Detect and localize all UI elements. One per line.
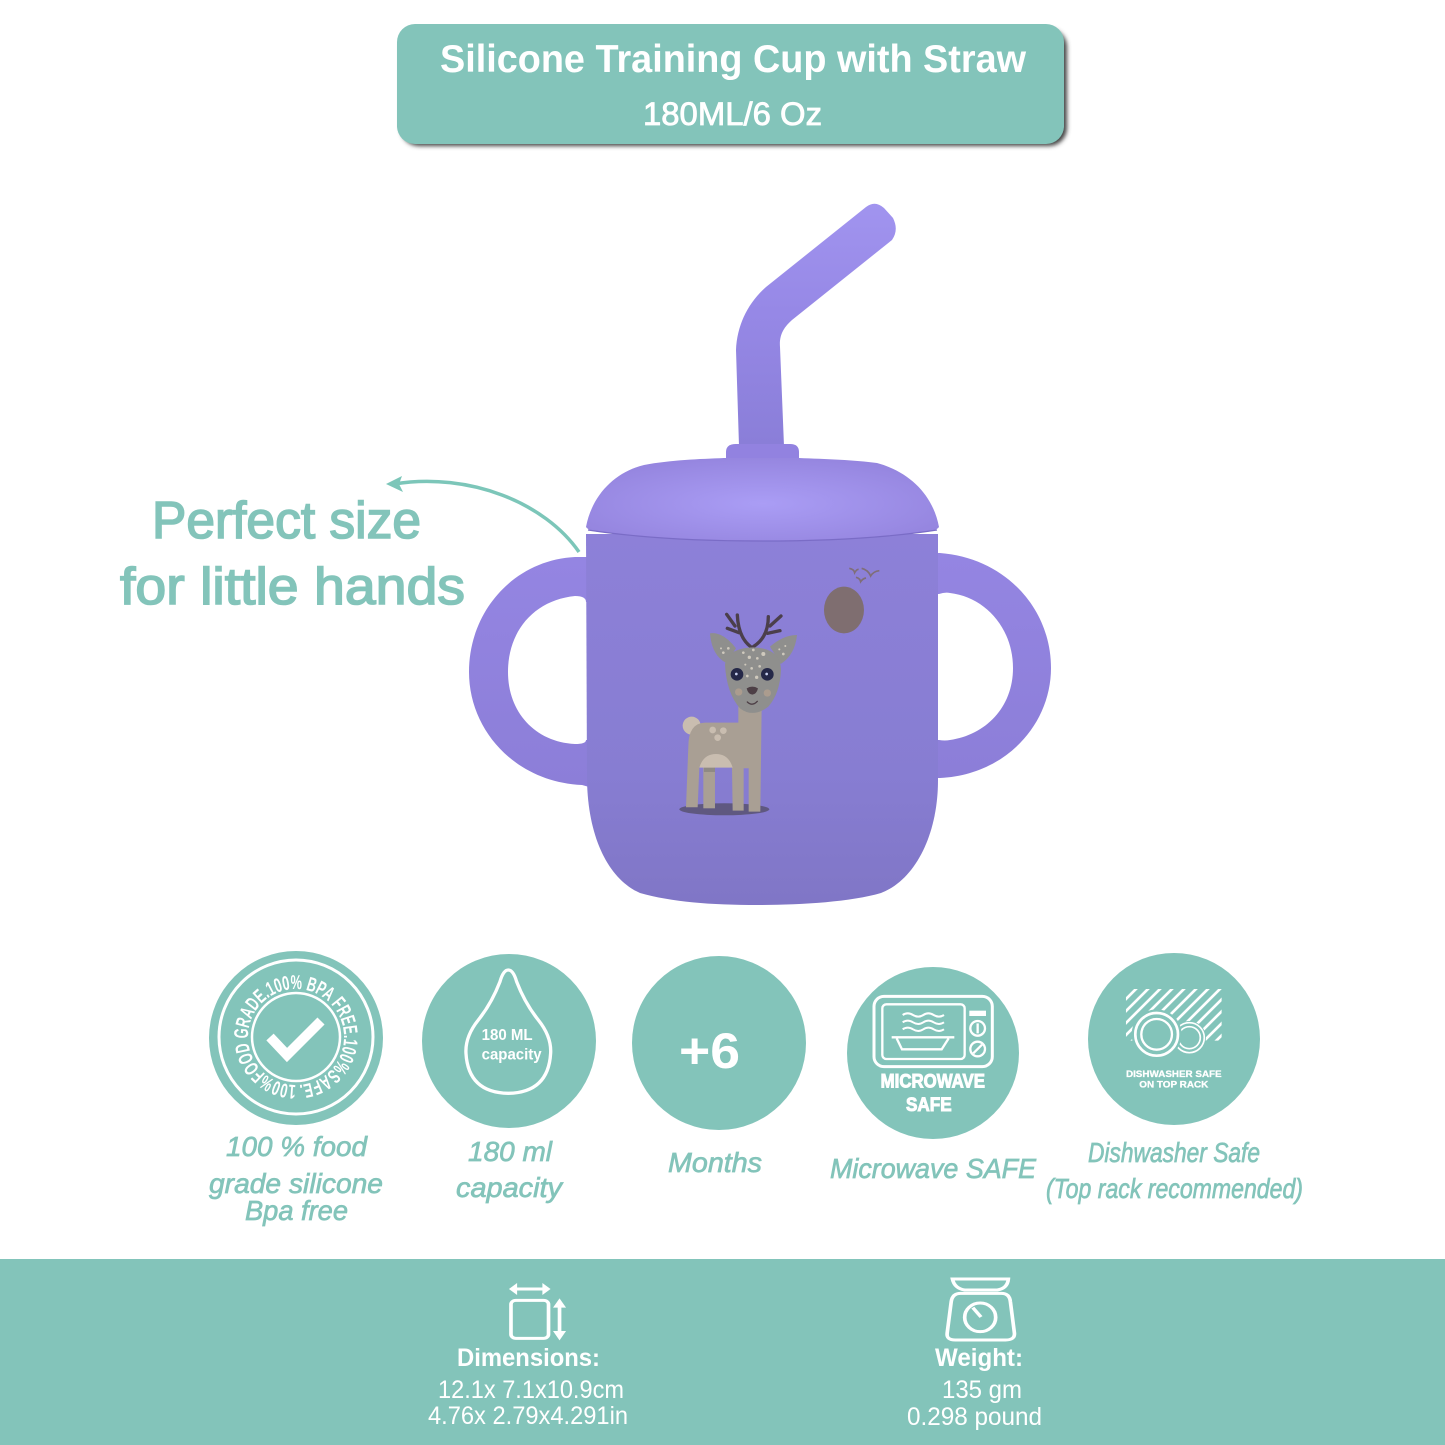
caption: dishwasher: (Top rack recommended) (1046, 1173, 1303, 1204)
badge: microwave safe (847, 967, 1019, 1139)
belly (699, 754, 733, 768)
badge: 180 ml capacity drop: 180 ML (482, 1027, 533, 1044)
callout: perfect size for little hands: Perfect size (152, 492, 421, 550)
tail (683, 717, 701, 735)
shadow (679, 803, 769, 815)
caption: capacity: capacity (456, 1172, 564, 1203)
caption: capacity (456, 1136, 564, 1203)
caption: microwave: Microwave SAFE (830, 1153, 1036, 1184)
badge: 180 ml capacity drop (422, 954, 596, 1128)
moon (824, 587, 864, 633)
caption: food grade: Bpa free (245, 1195, 348, 1226)
product: purple training cup (469, 204, 1051, 905)
arrow: callout to cup (386, 476, 579, 552)
weight text: Weight: (935, 1344, 1023, 1372)
eyes (731, 668, 774, 681)
icon: weight scale (947, 1279, 1014, 1340)
antlers (727, 614, 781, 647)
cup body (586, 534, 938, 905)
smile (747, 701, 757, 704)
badge: 180 ml capacity drop: capacity (482, 1046, 542, 1063)
caption: food grade (209, 1131, 383, 1226)
weight text (907, 1344, 1042, 1431)
badge: +6 months (632, 956, 806, 1130)
birds (849, 568, 879, 582)
body and legs (686, 707, 762, 812)
badge: food grade silicone: 100%FOOD GRADE.100% BPA FREE.100%SAFE. (234, 975, 358, 1099)
head spots (720, 645, 786, 679)
dimensions text (428, 1344, 628, 1430)
caption: food grade: grade silicone (209, 1168, 383, 1199)
dimensions text: Dimensions: (457, 1344, 600, 1372)
badge: food grade silicone (209, 951, 383, 1125)
badge: dishwasher safe: ON TOP RACK (1139, 1080, 1209, 1090)
weight text: 0.298 pound (907, 1403, 1042, 1431)
leg shade (704, 767, 715, 772)
head (725, 647, 781, 713)
weight text: 135 gm (942, 1376, 1022, 1404)
flank spots (709, 727, 727, 741)
title banner (397, 24, 1067, 146)
deer and moon print (679, 568, 879, 815)
cup lid (586, 458, 939, 541)
caption: dishwasher (1046, 1137, 1303, 1204)
nose (747, 687, 758, 695)
title banner: 180ML/6 Oz (643, 96, 822, 132)
bottom specification band (0, 1259, 1445, 1445)
dimensions text: 12.1x 7.1x10.9cm (438, 1376, 624, 1404)
callout: perfect size for little hands (120, 492, 465, 616)
cheeks (735, 688, 771, 697)
cup straw (736, 204, 896, 446)
dimensions text: 4.76x 2.79x4.291in (428, 1402, 628, 1430)
lid seam (588, 530, 937, 541)
badge: microwave safe: SAFE (906, 1095, 952, 1116)
ears (710, 633, 797, 664)
badge: +6 months: +6 (679, 1023, 740, 1079)
badge: dishwasher safe (1088, 953, 1260, 1125)
caption: capacity: 180 ml (468, 1136, 553, 1167)
badge: microwave safe: MICROWAVE (881, 1072, 985, 1093)
lid knob (726, 444, 799, 460)
icon: dimensions (509, 1283, 566, 1340)
far leg (703, 763, 715, 808)
badge: dishwasher safe: DISHWASHER SAFE (1126, 1069, 1222, 1079)
cup handles (469, 553, 1051, 790)
callout: perfect size for little hands: for little hands (120, 558, 465, 616)
title banner: Silicone Training Cup with Straw (440, 38, 1027, 81)
caption: food grade: 100 % food (226, 1131, 368, 1162)
caption: months: Months (668, 1147, 762, 1178)
caption: dishwasher: Dishwasher Safe (1088, 1137, 1260, 1168)
